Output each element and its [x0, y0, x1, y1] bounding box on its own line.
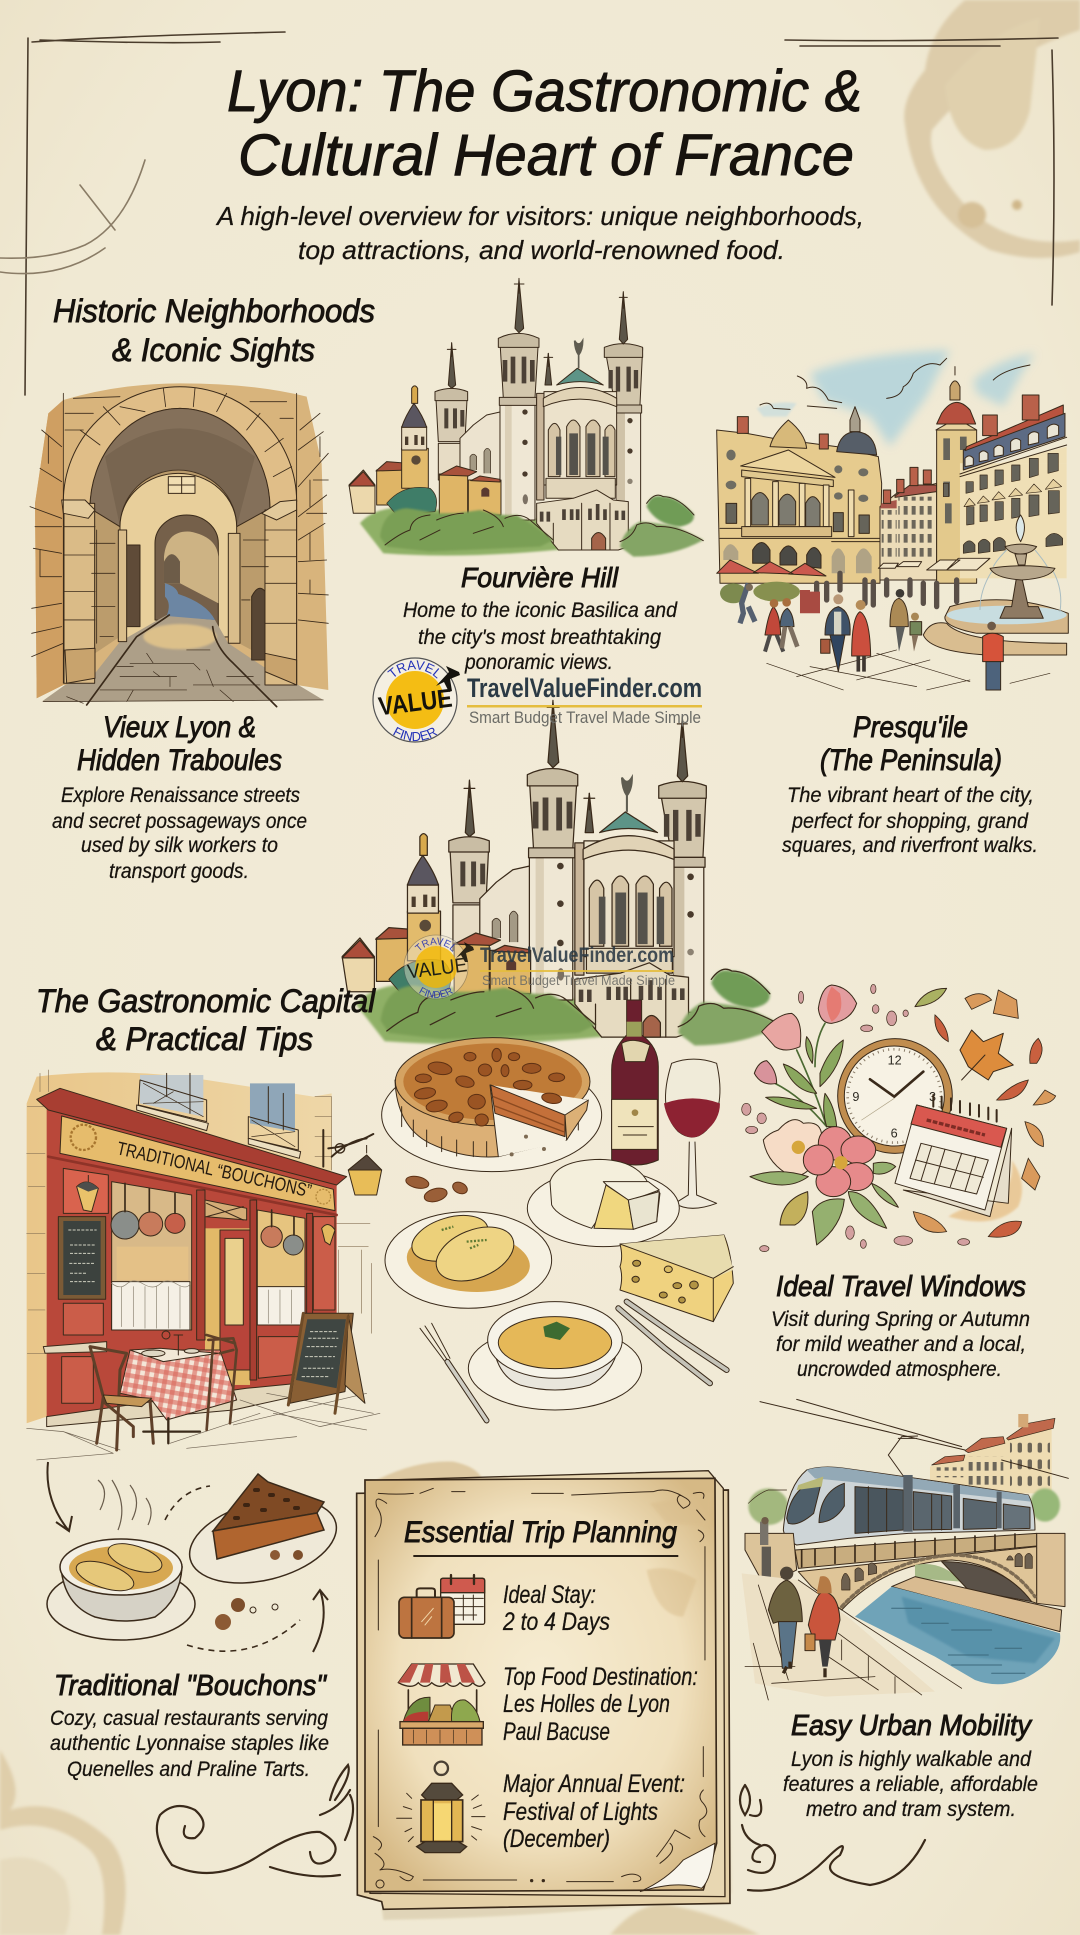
item: Vieux Lyon: used by silk workers to	[81, 834, 278, 857]
item: Ideal Travel Windows: Ideal Travel Windows	[776, 1271, 1026, 1303]
title: Lyon: The Gastronomic &	[227, 59, 862, 124]
illustration: Place Bellecour square	[717, 350, 1068, 690]
title: Cultural Heart of France	[238, 123, 854, 188]
illustration: stone archway traboule	[30, 383, 328, 707]
logo: TravelValueFinder: FINDER	[393, 726, 438, 742]
panel sheet and icons	[357, 1462, 732, 1920]
item: Easy Urban Mobility: features a reliable, affordable	[783, 1773, 1038, 1796]
item: Ideal Travel Windows	[771, 1271, 1030, 1381]
logo: TravelValueFinder: TRAVEL	[387, 660, 440, 679]
illustration: clock, calendar, flowers and leaves	[742, 984, 1056, 1252]
item: Easy Urban Mobility: metro and tram system.	[806, 1798, 1016, 1821]
item: Ideal Travel Windows: uncrowded atmosphere.	[797, 1358, 1002, 1381]
panel: essential trip planning: (December)	[503, 1825, 610, 1853]
item: Vieux Lyon: transport goods.	[109, 860, 249, 883]
watermark logo over basilica	[404, 934, 675, 1000]
item: Easy Urban Mobility: Easy Urban Mobility	[791, 1710, 1032, 1742]
item: Ideal Travel Windows: Visit during Spring or Autumn	[771, 1308, 1030, 1331]
heading: gastronomic capital: & Practical Tips	[96, 1021, 313, 1057]
item: Traditional Bouchons: authentic Lyonnaise staples like	[50, 1732, 329, 1755]
logo: TravelValueFinder: VALUE	[377, 683, 454, 721]
panel: essential trip planning: Paul Bacuse	[503, 1718, 610, 1746]
item: Vieux Lyon: Explore Renaissance streets	[61, 784, 300, 807]
item: Fourvière Hill: ponoramic views.	[464, 651, 613, 674]
item: Easy Urban Mobility: Lyon is highly walkable and	[791, 1748, 1032, 1771]
item: Fourvière Hill: Home to the iconic Basilica and	[403, 599, 678, 622]
item: Vieux Lyon: Vieux Lyon &	[103, 711, 256, 744]
item: Presqu'ile: perfect for shopping, grand	[791, 810, 1029, 833]
heading: historic neighborhoods: & Iconic Sights	[112, 332, 315, 368]
heading: gastronomic capital	[36, 983, 376, 1057]
item: Traditional Bouchons: Cozy, casual restaurants serving	[50, 1707, 328, 1730]
illustration: pie, wine, cheese and quenelles	[382, 1000, 733, 1421]
panel: essential trip planning: Major Annual Event:	[503, 1770, 685, 1798]
item: Presqu'ile: Presqu'ile	[853, 711, 968, 744]
coffee stain: top right	[904, 0, 1080, 258]
illustration: large basilica	[342, 700, 781, 1045]
flourish: bottom right scrollwork	[740, 1785, 925, 1891]
logo: TravelValueFinder	[372, 657, 702, 743]
heading: historic neighborhoods: Historic Neighborhoods	[53, 293, 375, 329]
illustration: tram on bridge over the river	[742, 1399, 1068, 1700]
logo: TravelValueFinder: Smart Budget Travel Made Simple	[469, 708, 701, 727]
watermark logo over basilica: VALUE	[406, 954, 468, 983]
item: Presqu'ile: (The Peninsula)	[820, 744, 1002, 777]
item: Presqu'ile	[782, 711, 1038, 857]
illustration: clock, calendar, flowers and leaves: 12	[888, 1053, 902, 1067]
item: Vieux Lyon: Hidden Traboules	[77, 744, 282, 777]
watermark logo over basilica: TravelValueFinder.com	[480, 944, 674, 967]
item: Presqu'ile: The vibrant heart of the city,	[787, 784, 1034, 807]
panel: essential trip planning: Top Food Destination:	[503, 1663, 698, 1691]
illustration: bouchon restaurant storefront: TRADITIONAL “BOUCHONS”	[115, 1137, 314, 1201]
watermark logo over basilica: TRAVEL	[414, 938, 455, 952]
item: Traditional Bouchons: Traditional "Bouchons"	[54, 1670, 328, 1702]
illustration: clock, calendar, flowers and leaves: 6	[891, 1127, 898, 1141]
item: Presqu'ile: squares, and riverfront walks.	[782, 834, 1038, 857]
heading: historic neighborhoods	[53, 293, 375, 368]
title	[227, 59, 862, 188]
panel: essential trip planning: Essential Trip Planning	[404, 1516, 677, 1549]
illustration: Fourvière basilica	[349, 278, 703, 557]
subtitle: top attractions, and world-renowned food.	[298, 235, 785, 265]
watermark logo over basilica: FINDER	[419, 987, 454, 998]
panel: essential trip planning: 2 to 4 Days	[502, 1608, 610, 1636]
illustration: clock, calendar, flowers and leaves: 3	[929, 1090, 936, 1104]
item: Fourvière Hill: the city's most breathtaking	[418, 626, 661, 649]
item: Easy Urban Mobility	[783, 1710, 1038, 1821]
panel: essential trip planning: Festival of Lights	[503, 1798, 658, 1826]
item: Fourvière Hill: Fourvière Hill	[461, 562, 619, 593]
illustration: bouchon restaurant storefront	[27, 1070, 382, 1460]
subtitle: A high-level overview for visitors: unique neighborhoods,	[215, 201, 864, 231]
flourish: bottom left scrollwork	[157, 1765, 353, 1876]
sketched frame lines	[0, 32, 1058, 395]
subtitle	[215, 201, 864, 265]
panel: essential trip planning: Les Holles de Lyon	[503, 1690, 670, 1718]
item: Vieux Lyon	[52, 711, 307, 883]
coffee stain: bottom left	[0, 1750, 760, 1935]
logo: TravelValueFinder: TravelValueFinder.com	[467, 673, 702, 703]
item: Traditional Bouchons	[50, 1670, 329, 1781]
item: Ideal Travel Windows: for mild weather and a local,	[776, 1333, 1026, 1356]
item: Traditional Bouchons: Quenelles and Praline Tarts.	[67, 1758, 310, 1781]
item: Fourvière Hill	[403, 562, 678, 674]
illustration: quenelle bowl and praline tart slice	[47, 1462, 345, 1652]
illustration: clock, calendar, flowers and leaves: 9	[852, 1090, 859, 1104]
panel: essential trip planning: Ideal Stay:	[503, 1581, 596, 1609]
watermark logo over basilica: Smart Budget Travel Made Simple	[482, 972, 675, 988]
item: Vieux Lyon: and secret possageways once	[52, 810, 307, 833]
heading: gastronomic capital: The Gastronomic Capital	[36, 983, 376, 1019]
panel: essential trip planning	[357, 1462, 732, 1920]
